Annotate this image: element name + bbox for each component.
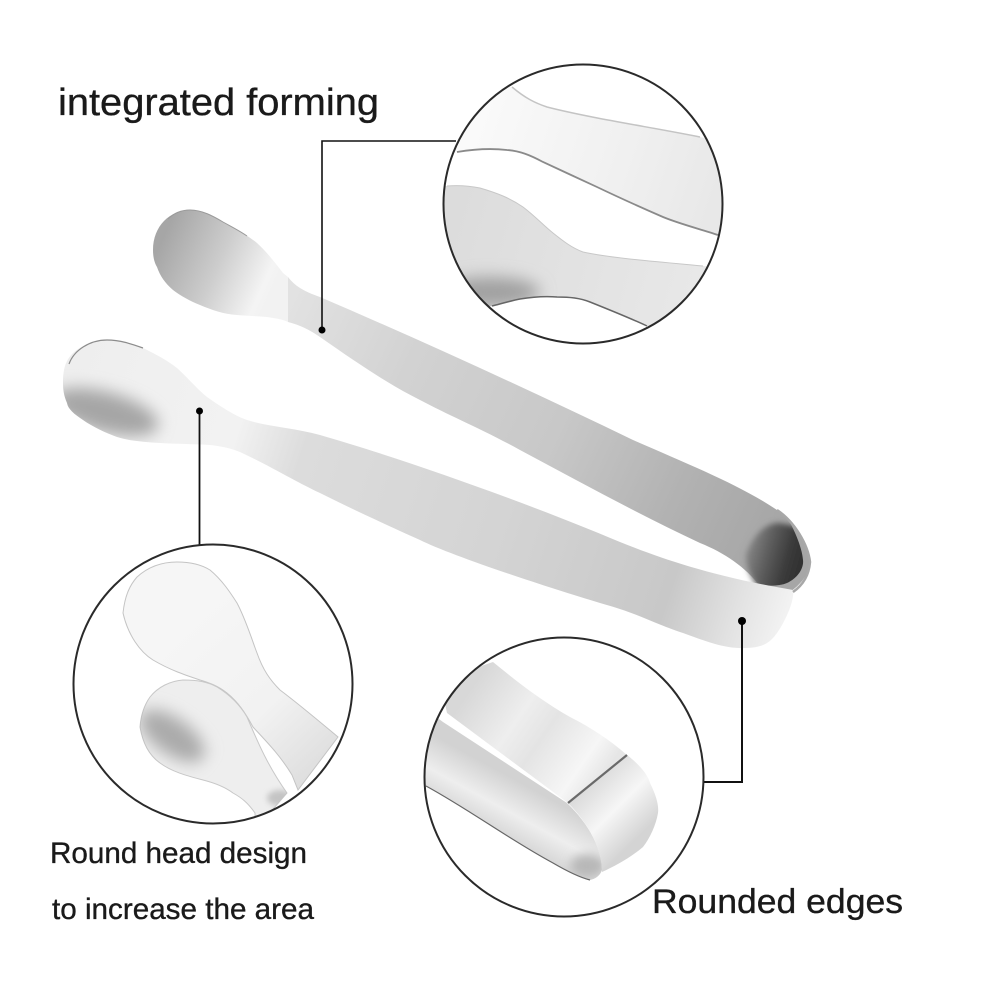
rim of tong bend bbox=[777, 510, 810, 592]
title: integrated forming: integrated forming bbox=[58, 82, 379, 124]
illustration: sugar tongs bbox=[47, 210, 812, 648]
lower arm of tongs bbox=[47, 340, 793, 648]
upper band bbox=[516, 102, 722, 234]
zoom circle: round head detail bbox=[74, 544, 352, 830]
head outline highlight bbox=[168, 210, 247, 236]
caption: round head design: Round head design bbox=[50, 837, 307, 870]
zoom circle: rounded edges detail bbox=[420, 638, 704, 916]
end face bbox=[568, 755, 658, 872]
large spoon head bbox=[123, 562, 338, 790]
lower edge bbox=[426, 786, 590, 880]
leader: round head bbox=[196, 408, 203, 546]
small spoon head bbox=[140, 680, 287, 830]
lower band bbox=[444, 186, 706, 326]
caption: round head design bbox=[50, 837, 314, 926]
top face bbox=[440, 662, 627, 803]
small spoon shading bbox=[140, 702, 286, 807]
seam bbox=[568, 755, 627, 803]
leader: rounded edges bbox=[703, 617, 746, 782]
lower face bbox=[426, 718, 602, 880]
head outline highlight bbox=[69, 340, 143, 364]
lower head shading bbox=[63, 379, 166, 442]
inner shadow of tong bend bbox=[744, 520, 804, 586]
upper arm of tongs bbox=[153, 210, 810, 592]
caption: round head design: to increase the area bbox=[52, 893, 314, 926]
caption: rounded edges: Rounded edges bbox=[652, 883, 903, 921]
zoom circle: integrated forming detail bbox=[430, 64, 735, 344]
leader: integrated forming bbox=[318, 141, 456, 334]
